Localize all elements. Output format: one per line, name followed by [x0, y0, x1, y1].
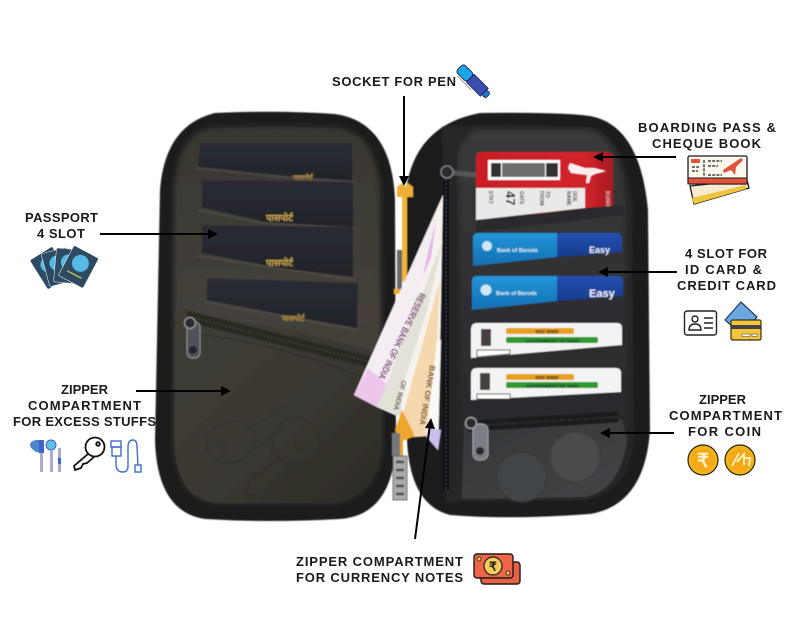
boarding pass	[476, 152, 625, 232]
label: passport 4 slot: 4 SLOT	[37, 226, 85, 241]
icon: rupee coin	[688, 445, 718, 475]
passport 4: पासपोर्ट	[281, 313, 306, 323]
label: zipper compartment for excess stuffs: COMPARTMENT	[28, 398, 141, 413]
label: socket for pen	[332, 64, 492, 186]
boarding pass: TO	[544, 191, 550, 198]
arrow: to excess pocket	[136, 386, 231, 396]
label: passport 4 slot: PASSPORT	[25, 210, 98, 225]
centre zipper	[441, 166, 476, 490]
icon: id card	[684, 311, 716, 335]
label: socket for pen: SOCKET FOR PEN	[332, 74, 456, 89]
pen in socket	[394, 183, 413, 294]
label: boarding pass and cheque book: CHEQUE BOOK	[652, 136, 762, 151]
passport 1: पासपोर्ट	[292, 173, 314, 182]
label: zipper compartment for coin: COMPARTMENT	[669, 408, 782, 423]
wallet photo	[155, 112, 650, 521]
icon: earphones	[30, 440, 61, 472]
passport 2: पासपोर्ट	[265, 212, 294, 224]
bank card 2	[472, 276, 623, 310]
icon: currency notes: ₹	[489, 560, 497, 574]
label: zipper compartment for excess stuffs: ZIPPER	[61, 382, 109, 397]
embossed keys	[202, 407, 320, 497]
passport 4	[207, 278, 358, 328]
icon: passports	[30, 245, 99, 289]
boarding pass: DOE	[571, 191, 577, 202]
label: 4 slot for id and credit card: ID CARD &	[685, 262, 762, 277]
zipper puller right	[466, 418, 488, 460]
bank card 1	[473, 233, 622, 266]
icon: boarding pass and cheque	[688, 156, 749, 204]
icon: rupee coin: ₹	[697, 451, 709, 472]
panel: left case with passports	[155, 112, 396, 521]
label: zipper compartment for coin: ZIPPER	[699, 392, 747, 407]
boarding pass: FROM	[538, 191, 544, 206]
icon: currency notes	[474, 554, 520, 584]
label: boarding pass and cheque book: BOARDING PASS &	[638, 120, 776, 135]
ID card 2	[471, 368, 621, 400]
label: zipper compartment for excess stuffs: FOR EXCESS STUFFS	[13, 414, 156, 429]
bank card 1: Bank of Baroda	[497, 248, 539, 254]
bank card 2: Bank of Baroda	[496, 291, 538, 297]
arrow: to boarding pass	[593, 152, 676, 162]
panel: right case with card slots	[406, 113, 650, 517]
arrow: to passports	[100, 229, 218, 239]
currency notes fan: OF INDIA	[392, 379, 407, 411]
icon: credit cards	[725, 302, 761, 340]
bank card 1: Easy	[589, 245, 610, 255]
ID card 1	[471, 323, 622, 358]
ID card 2: भारत सरकार	[535, 376, 560, 382]
label: zipper compartment for coin	[600, 392, 782, 475]
label: zipper compartment for coin: FOR COIN	[688, 424, 761, 439]
label: 4 slot for id and credit card: 4 SLOT FOR	[685, 246, 768, 261]
passport 3: पासपोर्ट	[265, 257, 294, 269]
passport 3	[202, 225, 353, 277]
passport 1	[198, 143, 352, 182]
label: 4 slot for id and credit card: CREDIT CARD	[677, 278, 776, 293]
icon: second coin	[725, 445, 755, 475]
arrow: to pen socket	[399, 96, 409, 186]
label: boarding pass and cheque book	[593, 120, 776, 204]
ID card 1: भारत सरकार	[535, 330, 560, 336]
label: 4 slot for id and credit card	[598, 246, 776, 340]
arrow: to coin pocket	[600, 428, 674, 438]
bank card 2: Easy	[589, 288, 616, 300]
icon: cable	[111, 440, 141, 472]
currency notes fan: RESERVE BANK OF INDIA	[376, 291, 427, 381]
ID card 1: GOVERNMENT OF INDIA	[526, 338, 580, 344]
icon: key	[74, 438, 104, 470]
currency notes fan: BANK OF INDIA	[417, 365, 437, 426]
label: passport 4 slot	[25, 210, 218, 289]
boarding pass: NAME	[565, 191, 571, 206]
arrow: to card slots	[598, 267, 677, 277]
zipper puller left	[184, 318, 200, 358]
label: zipper compartment for currency notes	[296, 418, 520, 585]
boarding pass: BOARD	[604, 191, 610, 209]
zipper pocket for excess stuffs	[174, 305, 382, 503]
boarding pass: 47	[503, 191, 518, 205]
currency notes fan	[354, 195, 443, 450]
arrow: to currency pocket	[415, 418, 435, 539]
zipper pull charm	[392, 433, 407, 500]
label: zipper compartment for excess stuffs	[13, 382, 231, 472]
ID card 2: GOVERNMENT OF INDIA	[526, 384, 580, 388]
label: zipper compartment for currency notes: ZIPPER COMPARTMENT	[296, 554, 463, 569]
passport 2	[202, 180, 353, 227]
label: zipper compartment for currency notes: FOR CURRENCY NOTES	[296, 570, 463, 585]
zipper pocket for coins	[462, 417, 627, 502]
boarding pass: GATE	[518, 191, 524, 205]
pocket folds	[196, 168, 358, 330]
boarding pass: ETKT	[487, 191, 493, 204]
icon: pen	[454, 64, 492, 101]
